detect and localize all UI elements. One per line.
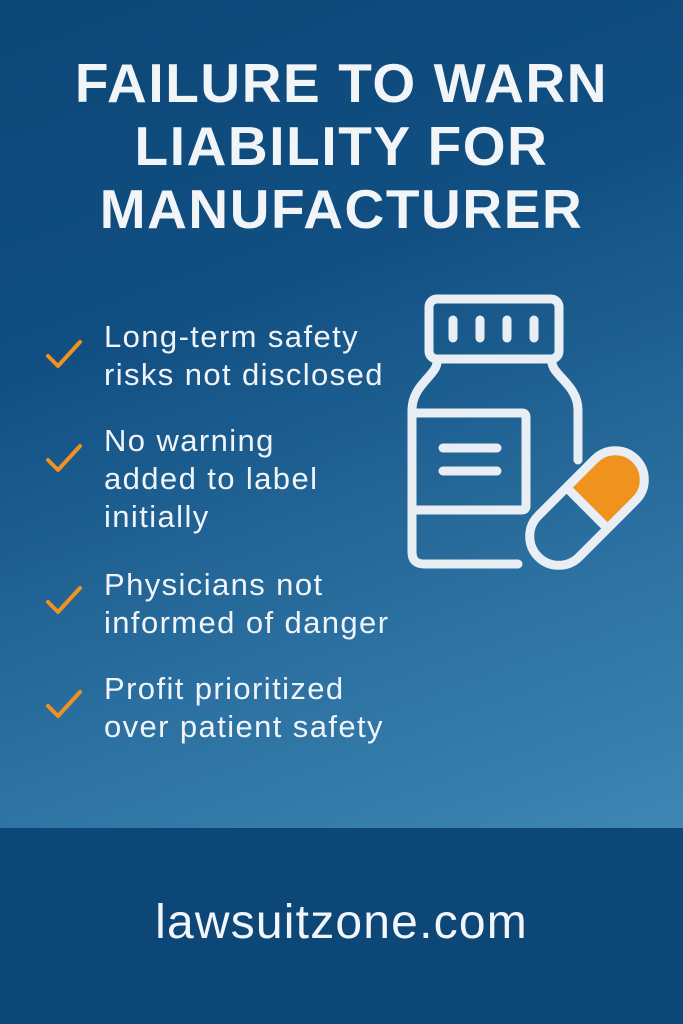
icon: check 3 <box>46 586 82 614</box>
title: LIABILITY FOR <box>135 115 548 177</box>
text: item 2: initially <box>104 499 210 534</box>
title: MANUFACTURER <box>100 178 583 240</box>
text: item 1 <box>104 319 384 392</box>
icon: check 2 <box>46 444 82 472</box>
text: item 4 <box>104 671 384 744</box>
text: item 4: over patient safety <box>104 709 384 744</box>
text: item 1: Long-term safety <box>104 319 359 354</box>
text: item 2: added to label <box>104 461 318 496</box>
text: item 3: Physicians not <box>104 567 323 602</box>
text: item 4: Profit prioritized <box>104 671 345 706</box>
text: item 2: No warning <box>104 423 275 458</box>
title: FAILURE TO WARN <box>75 52 608 114</box>
text: item 2 <box>104 423 318 534</box>
text: item 1: risks not disclosed <box>104 357 384 392</box>
text: item 3 <box>104 567 389 640</box>
icon: check 4 <box>46 690 82 718</box>
footer: website <box>0 828 683 1024</box>
icon: check 1 <box>46 340 82 368</box>
title <box>75 52 608 240</box>
footer: website: lawsuitzone.com <box>155 896 528 949</box>
text: item 3: informed of danger <box>104 605 389 640</box>
